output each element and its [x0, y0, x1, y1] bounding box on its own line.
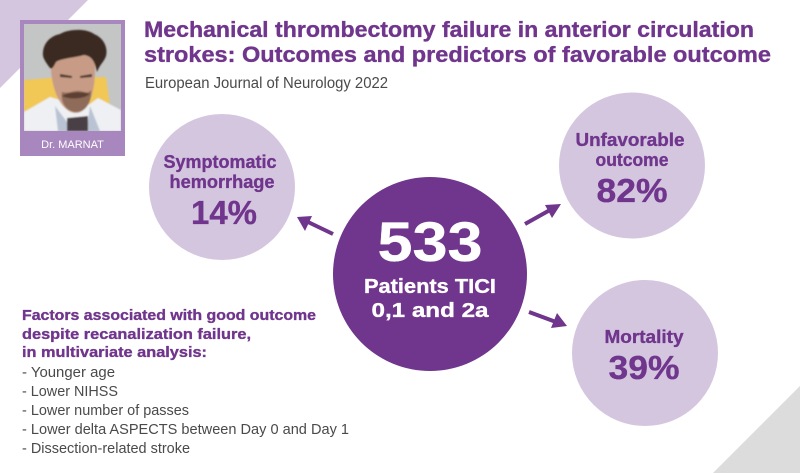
portrait caption: Dr. MARNAT: [41, 139, 104, 151]
stat circle: symptomatic hemorrhage: [149, 114, 295, 260]
title: Mechanical thrombectomy failure in anterior circulation: [144, 17, 754, 42]
stat circle: unfavorable outcome: Unfavorable: [576, 130, 684, 150]
journal reference: European Journal of Neurology 2022: [145, 75, 388, 92]
title: [144, 17, 771, 67]
factors text block: in multivariate analysis:: [22, 344, 207, 361]
central circle: 533 patients: 533: [378, 210, 482, 273]
factors text block: - Lower NIHSS: [22, 383, 118, 400]
arrow: to mortality: [529, 312, 567, 328]
factors text block: [22, 307, 349, 457]
title: strokes: Outcomes and predictors of favorable outcome: [144, 42, 771, 67]
stat circle: mortality: 39%: [608, 349, 680, 386]
decorative corner: top left triangle: [0, 0, 88, 88]
portrait photo: [24, 24, 121, 131]
factors text block: - Lower delta ASPECTS between Day 0 and Day 1: [22, 421, 349, 438]
stat circle: unfavorable outcome: [559, 92, 705, 238]
decorative corner: bottom right triangle: [713, 386, 800, 473]
stat circle: mortality: [572, 280, 718, 426]
portrait card: Dr. Marnat: [20, 20, 125, 156]
stat circle: unfavorable outcome: outcome: [596, 150, 668, 170]
factors text block: Factors associated with good outcome: [22, 307, 316, 324]
factors text block: - Dissection-related stroke: [22, 440, 190, 457]
stat circle: symptomatic hemorrhage: 14%: [191, 194, 257, 231]
central circle: 533 patients: Patients TICI: [364, 276, 496, 298]
stat circle: unfavorable outcome: 82%: [596, 172, 668, 209]
factors text block: despite recanalization failure,: [22, 326, 251, 343]
stat circle: symptomatic hemorrhage: Symptomatic: [164, 152, 276, 172]
factors text block: - Younger age: [22, 364, 115, 381]
stat circle: symptomatic hemorrhage: hemorrhage: [170, 172, 274, 192]
central circle: 533 patients: [333, 177, 527, 371]
stat circle: mortality: Mortality: [604, 327, 684, 347]
arrow: to symptomatic hemorrhage: [297, 216, 333, 234]
factors text block: - Lower number of passes: [22, 402, 189, 419]
arrow: to unfavorable outcome: [525, 204, 561, 224]
central circle: 533 patients: 0,1 and 2a: [372, 300, 490, 322]
